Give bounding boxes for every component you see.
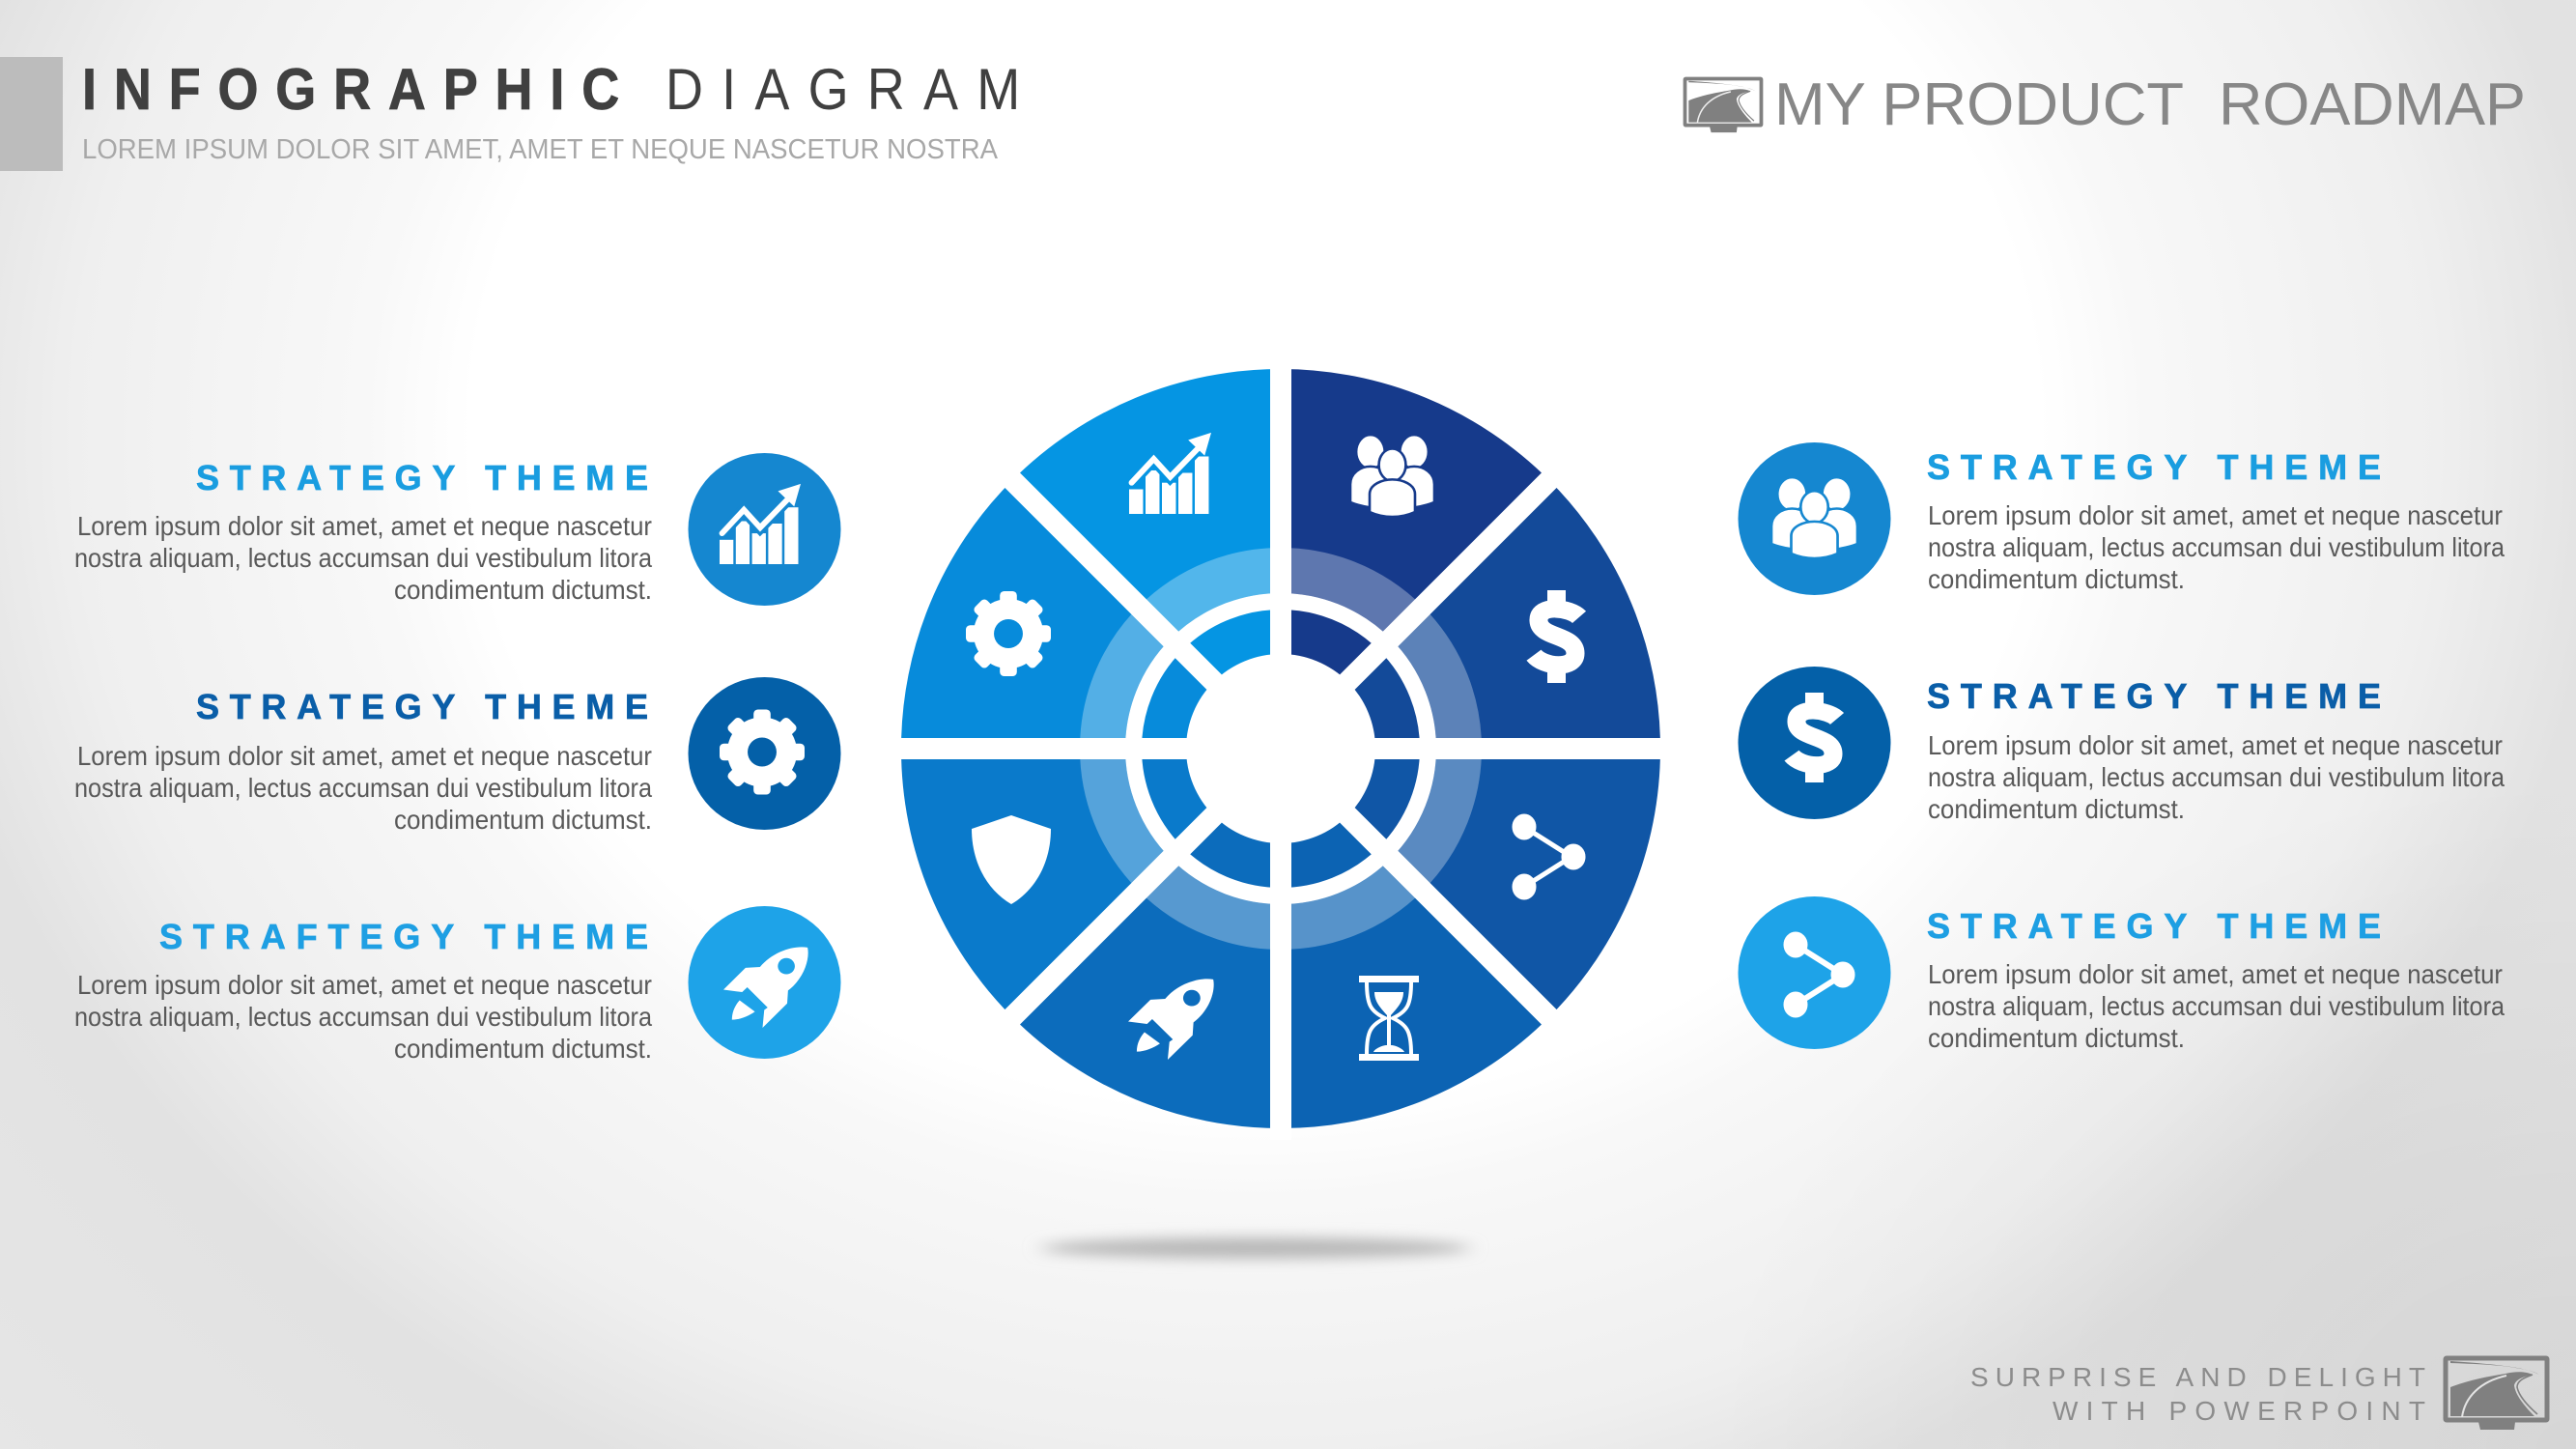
segment: upper right [1281,480,1660,749]
theme text: left 3: Lorem ipsum dolor sit amet, amet et neque nascetur [77,970,652,1000]
theme text: right 2: condimentum dictumst. [1928,794,2185,824]
segment: lower right [1281,749,1660,1017]
segment: top left [1012,369,1281,749]
icon badge: dollar [1739,667,1891,819]
wheel icon: growth chart [1129,433,1211,514]
brand logo and name: my product roadmap: MY PRODUCT [1774,71,2184,138]
title: INFOGRAPHIC [82,57,619,123]
footer logo [2446,1358,2547,1430]
theme text: right 1 [1927,447,2505,594]
brand logo and name: my product roadmap: ROADMAP [2219,71,2526,138]
icon badge: growth chart [688,453,840,606]
icon badge: gear [688,677,840,830]
theme text: left 2: nostra aliquam, lectus accumsan dui vestibulum litora [74,773,653,803]
theme text: right 2: STRATEGY THEME [1927,676,2381,716]
theme text: left 1 [74,458,653,605]
theme text: left 2: STRATEGY THEME [196,687,648,726]
floor shadow below wheel [1041,1237,1470,1259]
segment: bottom left [1012,749,1281,1128]
theme text: right 3 [1927,906,2505,1053]
wheel icon: gear [966,591,1051,676]
theme text: right 2: Lorem ipsum dolor sit amet, amet et neque nascetur [1928,730,2503,760]
wheel diagram [889,357,1673,1140]
wheel icon: hourglass [1359,976,1419,1061]
icon badge: share [1739,896,1891,1049]
theme text: left 1: STRATEGY THEME [196,458,648,497]
header accent block [0,57,63,171]
white inner ring [1134,601,1428,896]
theme text: right 1: STRATEGY THEME [1927,447,2381,487]
theme text: right 3: condimentum dictumst. [1928,1023,2185,1053]
theme text: right 3: nostra aliquam, lectus accumsan dui vestibulum litora [1928,991,2505,1021]
wheel icon: rocket [1128,979,1214,1060]
center hub [1186,654,1375,843]
theme text: left 3: STRAFTEGY THEME [159,917,648,956]
wheel icon: share [1513,814,1585,899]
theme text: right 1: condimentum dictumst. [1928,564,2185,594]
theme text: right 1: Lorem ipsum dolor sit amet, amet et neque nascetur [1928,500,2503,530]
theme text: right 2 [1927,676,2505,824]
theme text: left 3: condimentum dictumst. [394,1034,652,1064]
title: DIAGRAM [665,57,1020,123]
segment: upper left [901,480,1281,749]
theme text: right 2: nostra aliquam, lectus accumsan dui vestibulum litora [1928,762,2505,792]
subtitle: LOREM IPSUM DOLOR SIT AMET, AMET ET NEQUE NASCETUR NOSTRA [82,134,999,165]
theme text: left 1: condimentum dictumst. [394,575,652,605]
theme text: right 3: STRATEGY THEME [1927,906,2381,946]
theme text: right 3: Lorem ipsum dolor sit amet, amet et neque nascetur [1928,959,2503,989]
icon badge: rocket [688,906,840,1059]
footer tagline: WITH POWERPOINT [2052,1396,2425,1426]
icon badge: people [1739,442,1891,595]
footer tagline: SURPRISE AND DELIGHT [1970,1362,2425,1392]
theme text: left 2: condimentum dictumst. [394,805,652,835]
theme text: right 1: nostra aliquam, lectus accumsan dui vestibulum litora [1928,532,2505,562]
wheel icon: people [1350,435,1434,517]
theme text: left 1: nostra aliquam, lectus accumsan dui vestibulum litora [74,543,653,573]
translucent ring [1103,570,1458,927]
footer tagline [1970,1362,2425,1426]
title [82,57,1020,123]
segment: top right [1281,369,1549,749]
segment: bottom right [1281,749,1549,1128]
wheel icon: shield [972,815,1051,904]
brand logo and name: my product roadmap [1685,71,2526,138]
wheel icon: dollar [1534,590,1579,683]
theme text: left 2: Lorem ipsum dolor sit amet, amet et neque nascetur [77,741,652,771]
theme text: left 2 [74,687,653,835]
theme text: left 3: nostra aliquam, lectus accumsan dui vestibulum litora [74,1002,653,1032]
segment: lower left [901,749,1281,1017]
theme text: left 3 [74,917,653,1064]
theme text: left 1: Lorem ipsum dolor sit amet, amet et neque nascetur [77,511,652,541]
